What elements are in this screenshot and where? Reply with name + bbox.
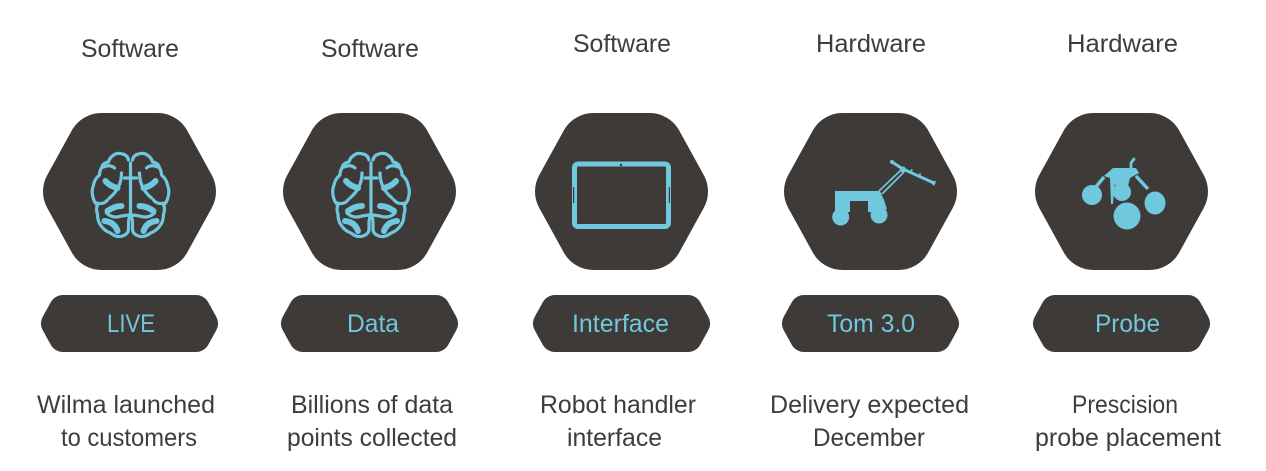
heading: Hardware: Hardware [1067,30,1178,58]
label text: LIVE: LIVE [107,310,155,338]
heading: Software: Software [81,35,179,63]
column: Probe hardware [1035,30,1221,452]
heading: Software: Software [321,35,419,63]
caption: Delivery expected December: December [813,424,925,452]
label text: Probe: Probe [1095,310,1160,338]
caption: Prescision probe placement: Prescision [1072,391,1178,419]
label pill: Probe [1047,309,1196,338]
caption: Prescision probe placement [1035,391,1221,452]
caption: Delivery expected December [770,391,969,452]
column: Interface software [540,30,696,452]
label pill: Tom 3.0 [796,309,945,338]
icon: probe robot [1082,159,1166,230]
caption: Billions of data points collected: Billions of data [291,391,453,419]
caption: Billions of data points collected [287,391,457,452]
hexagon panel [569,147,674,236]
caption: Robot handler interface: Robot handler [540,391,696,419]
icon: tablet [573,164,670,226]
icon: brain [333,153,409,237]
icon: robot with arm [832,160,936,226]
hexagon panel [1069,147,1174,236]
label text: Tom 3.0: Tom 3.0 [827,310,915,338]
caption: Billions of data points collected: points collected [287,424,457,452]
caption: Robot handler interface: interface [567,424,662,452]
label pill: LIVE [55,309,204,338]
heading: Hardware: Hardware [816,30,926,58]
hexagon panel [77,147,182,236]
heading: Software: Software [573,30,671,58]
caption: Wilma launched to customers [37,391,215,452]
caption: Wilma launched to customers: Wilma launched [37,391,215,419]
label text: Interface: Interface [572,310,669,338]
caption: Robot handler interface [540,391,696,452]
label pill: Data [295,309,444,338]
icon: brain [92,153,169,237]
hexagon panel [317,147,422,236]
caption: Prescision probe placement: probe placement [1035,424,1221,452]
column: Wilma software [37,35,215,452]
column: Data software [287,35,457,452]
label text: Data: Data [347,310,399,338]
column: Tom 3.0 hardware [770,30,969,452]
caption: Delivery expected December: Delivery expected [770,391,969,419]
caption: Wilma launched to customers: to customers [61,424,197,452]
label pill: Interface [547,309,696,338]
hexagon panel [818,147,923,236]
